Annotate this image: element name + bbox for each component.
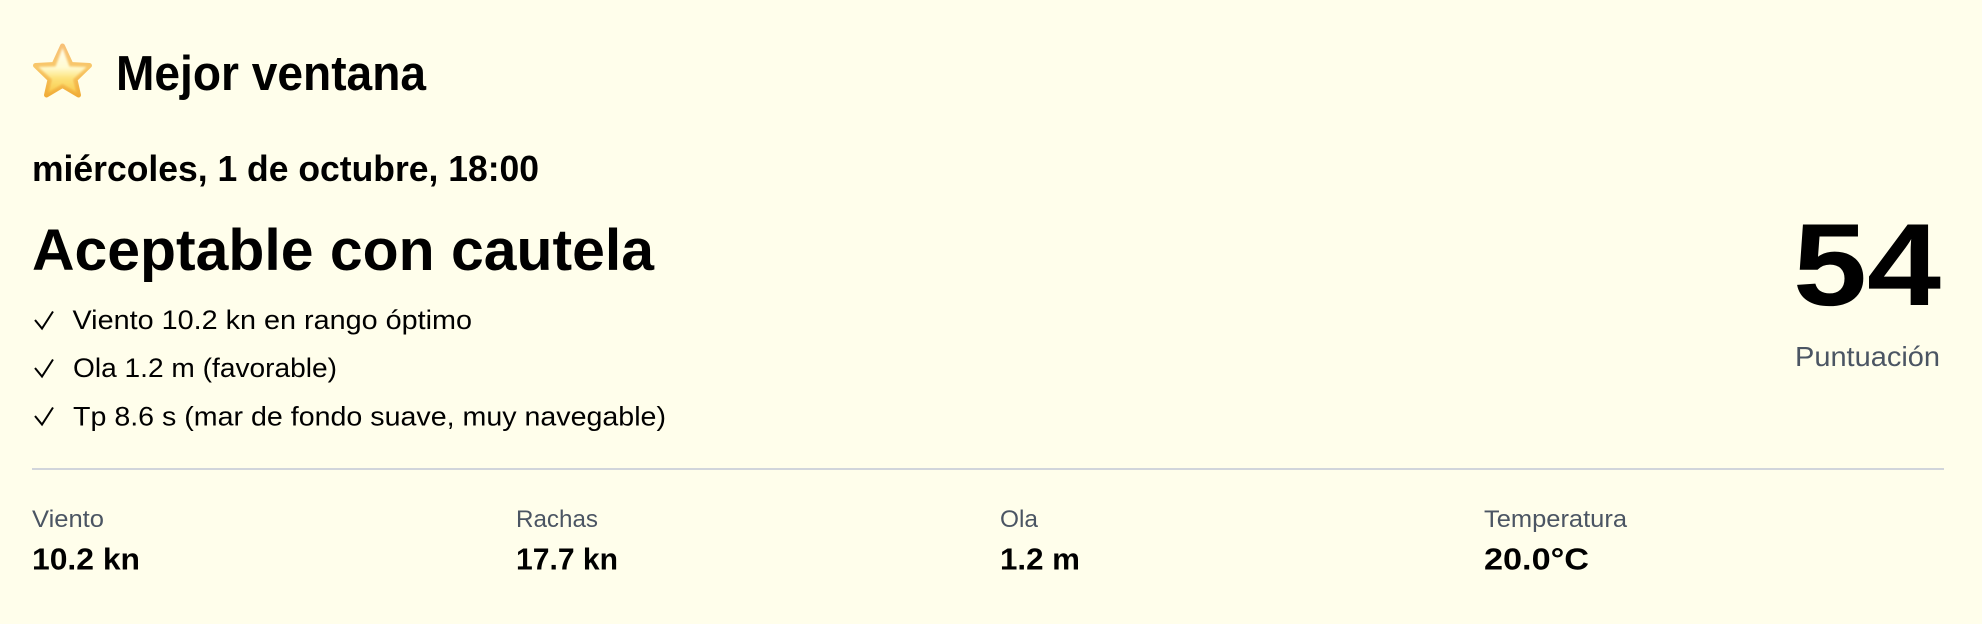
stat: gusts: 17.7 kn <box>516 542 618 576</box>
stat: temperature: Temperatura <box>1484 506 1628 533</box>
heading: Mejor ventana: Mejor ventana <box>116 47 427 101</box>
date and time: miércoles, 1 de octubre, 18:00 <box>32 148 539 189</box>
score number: 54 <box>1793 199 1941 330</box>
stat: wave <box>1000 506 1080 576</box>
score label: Puntuación <box>1795 341 1940 372</box>
stat: temperature: 20.0°C <box>1484 542 1589 576</box>
reason: period: Tp 8.6 s (mar de fondo suave, muy navegable) <box>73 402 666 432</box>
verdict heading: Aceptable con cautela <box>32 218 655 283</box>
stat: gusts: Rachas <box>516 506 598 533</box>
stat: wind: 10.2 kn <box>32 542 140 576</box>
stat: gusts <box>516 506 618 576</box>
stat: temperature <box>1484 506 1628 576</box>
icon: star <box>36 46 90 95</box>
stat: wind <box>32 506 140 576</box>
reasons list <box>35 305 666 432</box>
reason: wave: Ola 1.2 m (favorable) <box>73 353 337 383</box>
stat: wind: Viento <box>32 506 104 533</box>
stat: wave: 1.2 m <box>1000 542 1080 576</box>
stat: wave: Ola <box>1000 506 1039 533</box>
reason: wind: Viento 10.2 kn en rango óptimo <box>72 305 472 335</box>
